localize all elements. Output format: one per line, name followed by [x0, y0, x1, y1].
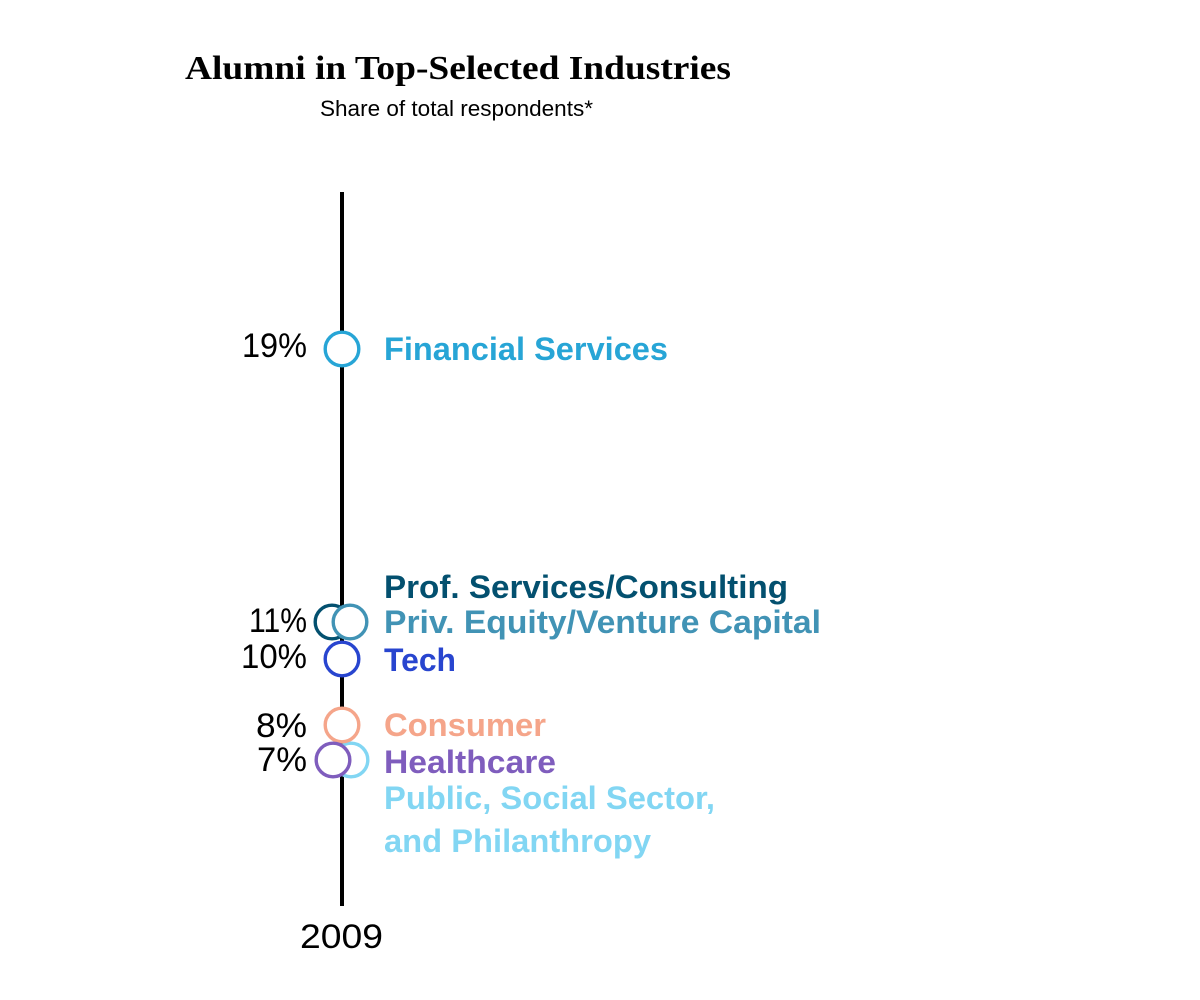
data point: Prof. Services/Consulting: Prof. Services/Consulting — [384, 569, 788, 605]
data point: Tech — [241, 638, 456, 678]
data point: Tech: Tech — [384, 642, 456, 678]
data point: Prof. Services/Consulting — [315, 569, 788, 639]
data point: Financial Services — [242, 327, 668, 367]
data point: Healthcare: Healthcare — [384, 744, 556, 780]
data point: Healthcare — [257, 741, 556, 780]
data point: Financial Services: Financial Services — [384, 331, 668, 367]
data point: Public, Social Sector, and Philanthropy: Public, Social Sector, — [384, 780, 715, 816]
subtitle: Share of total respondents* — [320, 96, 593, 121]
data point: Financial Services: 19% — [242, 327, 307, 365]
year label: 2009 — [300, 918, 383, 956]
data point: Consumer — [256, 707, 546, 745]
data point: Public, Social Sector, and Philanthropy: and Philanthropy — [384, 823, 651, 859]
data point: Public, Social Sector, and Philanthropy — [334, 743, 715, 859]
title: Alumni in Top-Selected Industries — [185, 50, 731, 87]
data point: Consumer: 8% — [256, 707, 307, 745]
timeline axis — [340, 192, 344, 906]
data point: Priv. Equity/Venture Capital — [249, 602, 821, 640]
data point: Priv. Equity/Venture Capital: Priv. Equity/Venture Capital — [384, 604, 821, 640]
data point: Consumer: Consumer — [384, 707, 546, 743]
data point: Priv. Equity/Venture Capital: 11% — [249, 602, 307, 640]
data point: Tech: 10% — [241, 638, 307, 676]
data point: Healthcare: 7% — [257, 741, 307, 779]
